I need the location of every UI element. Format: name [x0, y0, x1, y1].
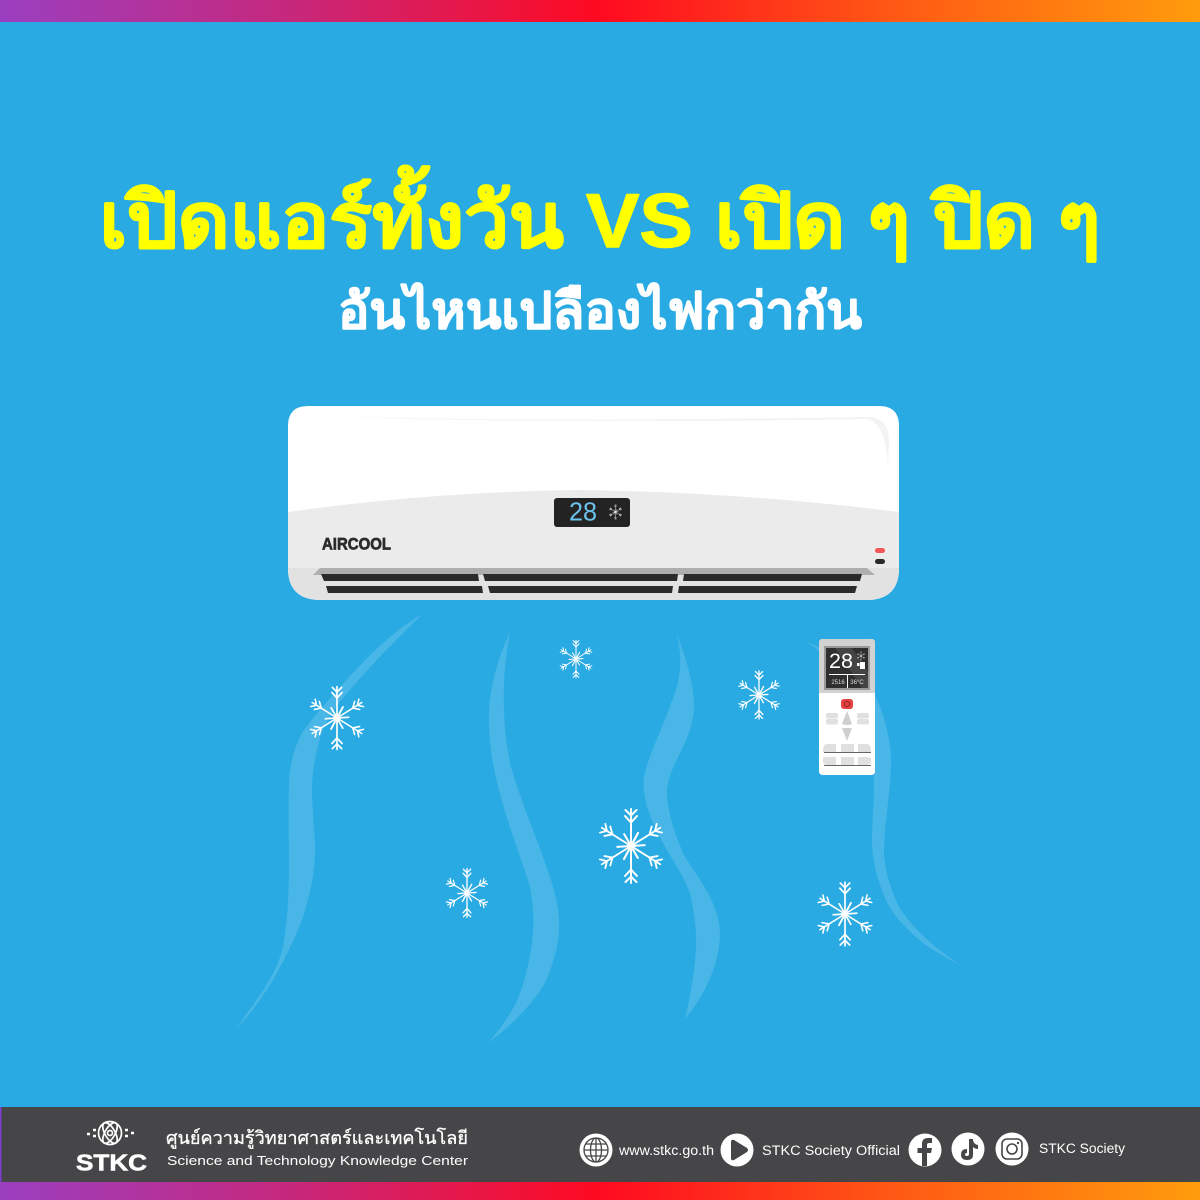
snowflake 5: [445, 869, 489, 917]
air conditioner unit: [288, 406, 899, 600]
snowflake 3: [738, 671, 780, 719]
remote screen: 36°C: [850, 680, 864, 686]
footer panel: [0, 1107, 1200, 1182]
icon: instagram: [996, 1132, 1028, 1166]
remote screen: 28: [829, 650, 853, 673]
lower grey curved panel: [288, 490, 899, 600]
wind stream 1: [237, 614, 422, 1028]
vent lid: [313, 568, 875, 575]
wind stream 4: [804, 640, 962, 966]
title: เปิดแอร์ทั้งวัน VS เปิด ๆ ปิด ๆ: [100, 165, 1100, 264]
remote buttons: [823, 711, 871, 766]
website url: www.stkc.go.th: [618, 1143, 714, 1158]
vent slats: [321, 574, 862, 593]
youtube name: STKC Society Official: [762, 1143, 900, 1158]
icon: globe: [580, 1134, 612, 1166]
center name in Thai: ศูนย์ความรู้วิทยาศาสตร์และเทคโนโลยี: [166, 1127, 468, 1149]
logo atom mark: [87, 1121, 134, 1145]
top gradient bar: [0, 0, 1200, 22]
unit body: [288, 406, 899, 600]
snowflake 1: [309, 687, 365, 749]
remote screen: 2516: [831, 680, 845, 686]
logo wordmark: STKC: [76, 1150, 147, 1176]
remote screen: [824, 646, 870, 690]
remote body: [819, 639, 875, 775]
snowflake 4: [598, 809, 664, 883]
icon: tiktok: [952, 1132, 984, 1166]
top highlight line: [335, 417, 889, 470]
remote head: [819, 639, 875, 693]
red indicator light: [875, 548, 885, 553]
brand name: AIRCOOL: [322, 534, 391, 554]
remote control: [819, 639, 875, 775]
center name in English: Science and Technology Knowledge Center: [167, 1153, 469, 1168]
black indicator light: [875, 559, 885, 564]
STKC logo: [76, 1121, 147, 1176]
temperature display: 28: [569, 496, 597, 526]
power button: [841, 699, 853, 709]
bottom gradient bar: [0, 1182, 1200, 1200]
temperature display: [554, 496, 630, 527]
snowflake 2: [559, 640, 593, 678]
instagram name: STKC Society: [1039, 1141, 1125, 1156]
wind stream 2: [488, 632, 559, 1043]
icon: play: [720, 1134, 754, 1166]
icon: facebook: [908, 1134, 942, 1166]
subtitle: อันไหนเปลืองไฟกว่ากัน: [338, 282, 862, 339]
wind stream 3: [644, 627, 720, 1019]
cold air wind streams: [237, 614, 962, 1043]
snowflake 6: [817, 882, 873, 946]
bottom band: [288, 568, 899, 600]
